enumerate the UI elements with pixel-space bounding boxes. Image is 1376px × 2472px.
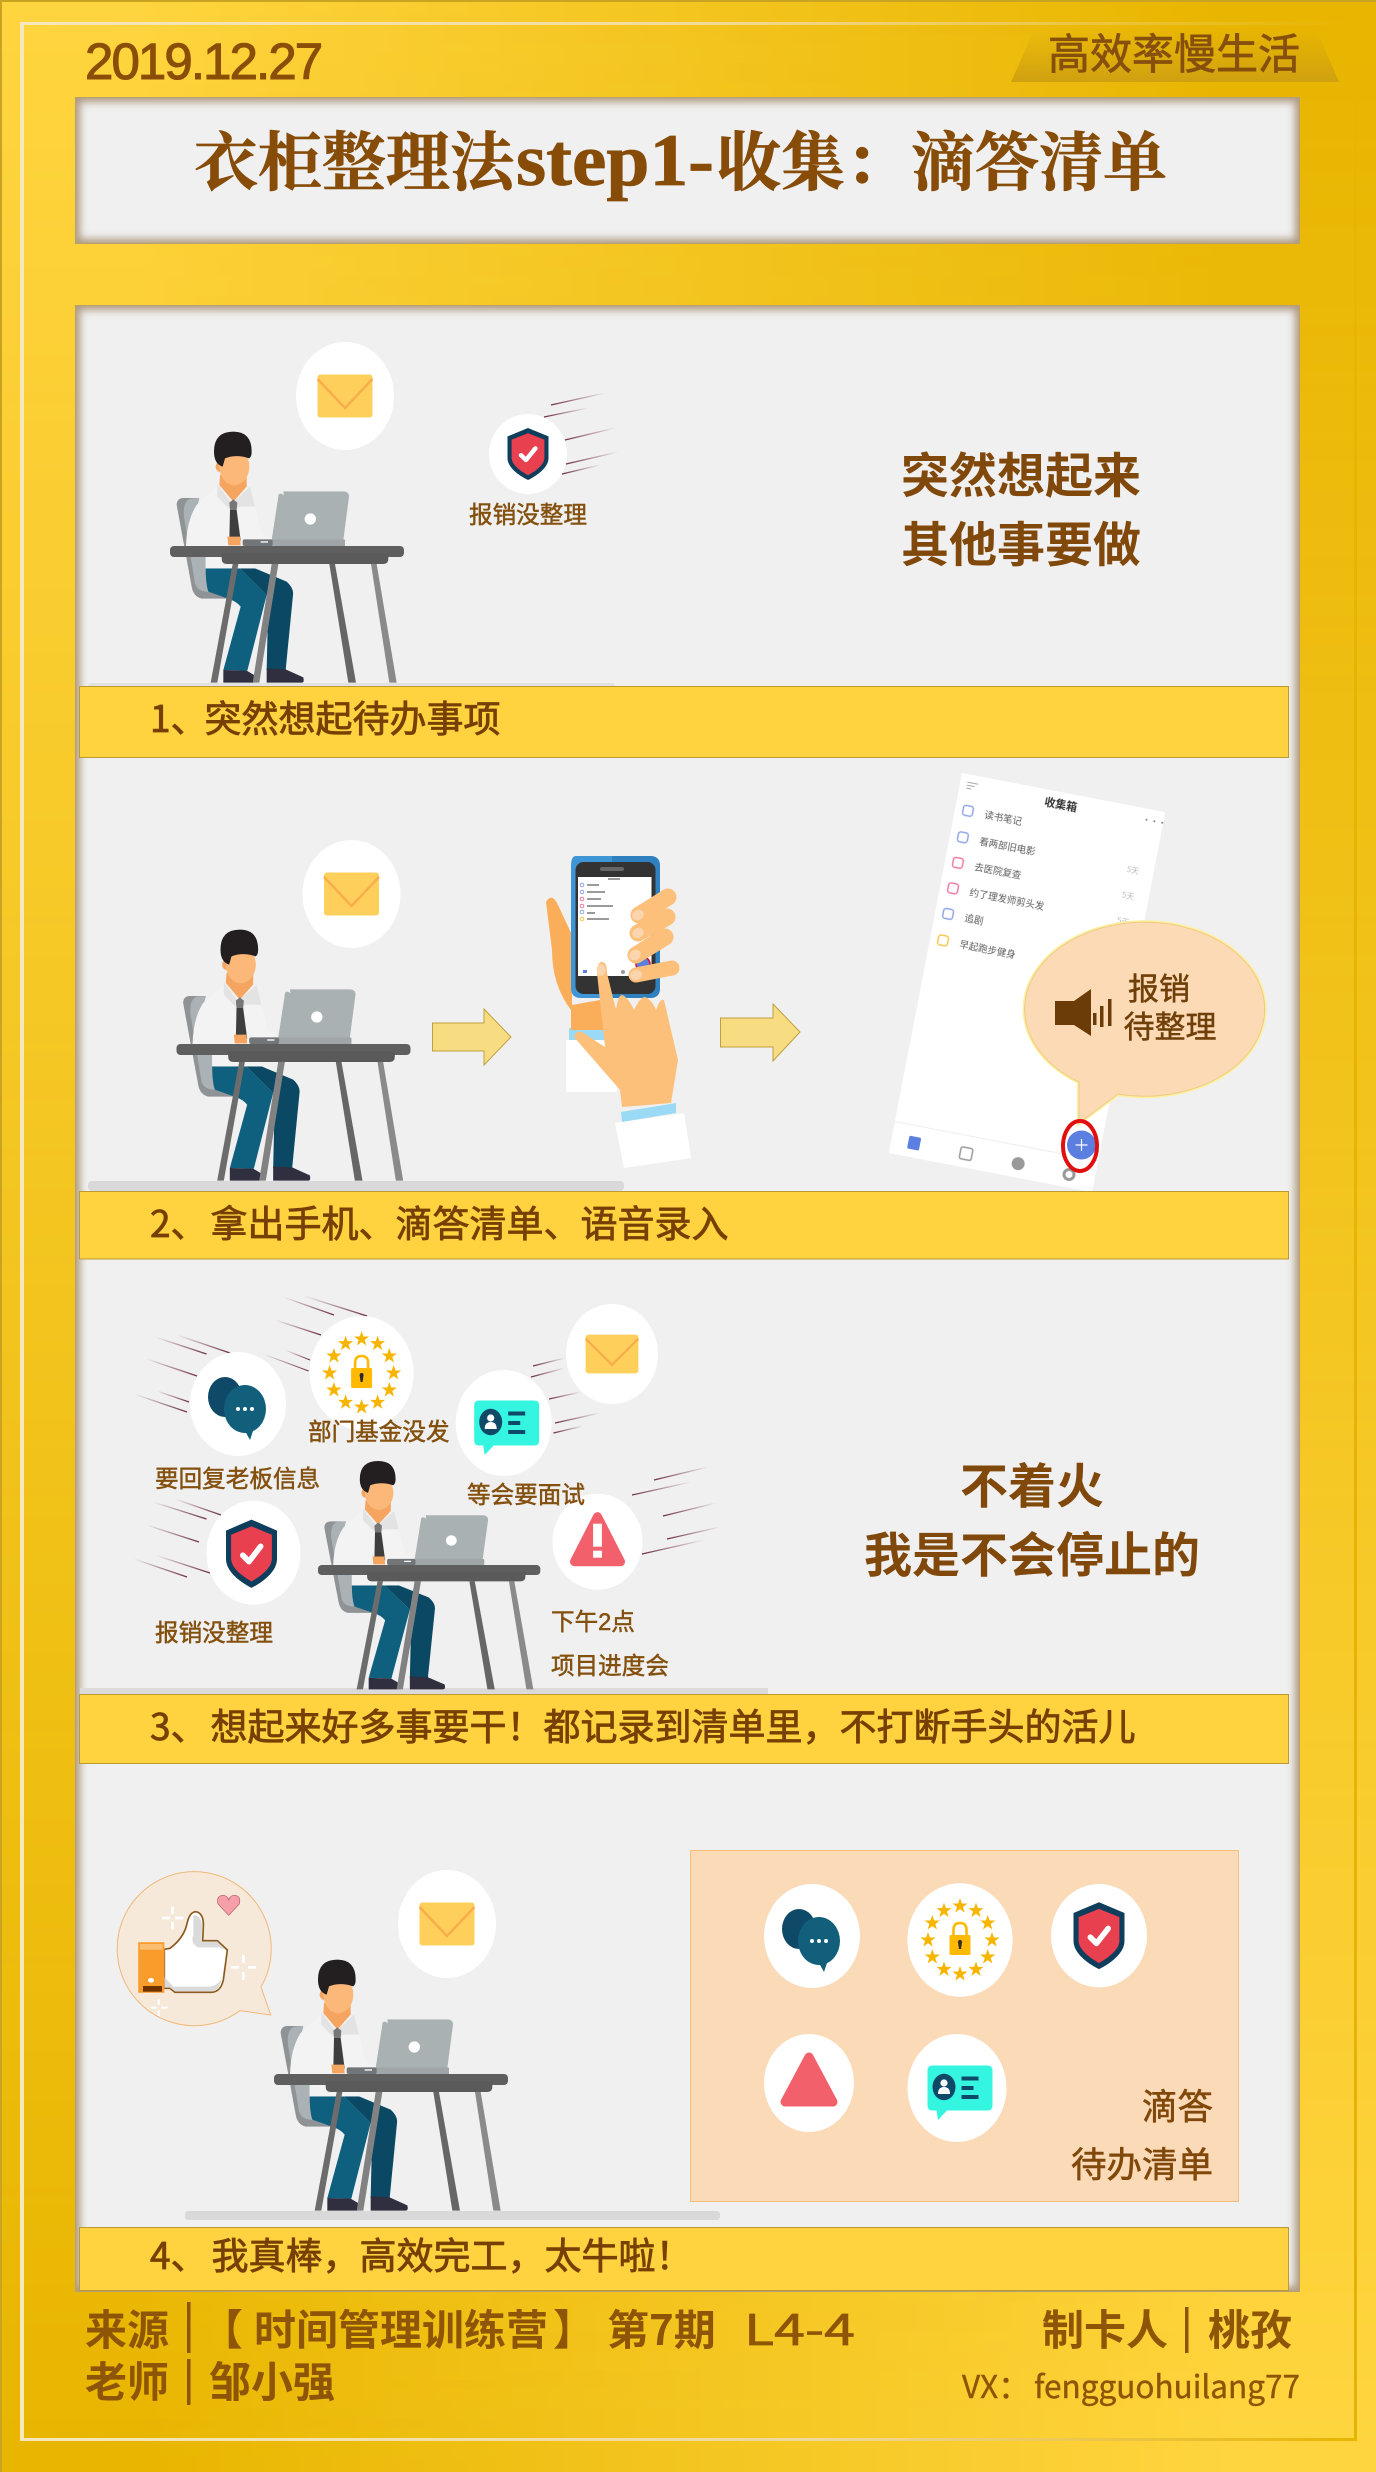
text: 不着火 我是不会停止的: 我是不会停止的 xyxy=(864,1530,1200,1583)
title: 收集： xyxy=(717,112,909,204)
app screenshot: inbox list xyxy=(889,773,1168,1193)
footer: source and teacher: 来源 xyxy=(85,2297,169,2358)
arrow 1 xyxy=(432,1009,511,1065)
text: 突然想起来 其他事要做: 突然想起来 xyxy=(901,450,1141,504)
person at desk 1 xyxy=(170,432,404,683)
title: 衣柜整理法 xyxy=(194,112,519,204)
label: 滴答 待办清单: 待办清单 xyxy=(1071,2137,1213,2188)
app screenshot: inbox list: 看两部旧电影 xyxy=(978,834,1037,858)
title xyxy=(194,112,1167,204)
app screenshot: inbox list: 5天 xyxy=(1121,890,1135,903)
label: 报销没整理: 报销没整理 xyxy=(469,502,587,529)
panel: main content card xyxy=(75,305,1300,2292)
app screenshot: inbox list: 约了理发师剪头发 xyxy=(968,885,1046,913)
title: step1- xyxy=(516,120,714,202)
icon: warning xyxy=(764,2034,854,2132)
footer: source and teacher: L4-4 xyxy=(744,2297,855,2358)
callout: 报销待整理: 报销 xyxy=(1128,964,1190,1009)
icon: chat xyxy=(764,1884,860,1988)
title: 滴答清单 xyxy=(911,112,1167,204)
callout: thumbs up xyxy=(117,1872,271,2026)
red ring around add button xyxy=(1063,1121,1097,1171)
panel 1: sudden thought xyxy=(80,342,1288,758)
footer: author and wechat: 桃孜 xyxy=(1208,2297,1292,2358)
icon: card xyxy=(908,2034,1006,2142)
icon: card bubble 3 xyxy=(456,1370,552,1476)
person at desk 4 xyxy=(274,1960,508,2211)
step bar 4 xyxy=(80,2226,1288,2290)
app screenshot: inbox list: 5天 xyxy=(1116,915,1130,928)
speed lines 3 right xyxy=(531,1358,720,1554)
icon: warning bubble 3 xyxy=(552,1494,642,1590)
label: 要回复老板信息: 要回复老板信息 xyxy=(155,1466,320,1493)
panel: title card xyxy=(75,97,1300,244)
brand tag: 高效率慢生活: 高效率慢生活 xyxy=(1048,21,1300,82)
icon: lock stars 3 xyxy=(310,1316,414,1430)
icon: shield bubble 1 xyxy=(489,414,567,494)
text: 突然想起来 其他事要做 xyxy=(901,450,1141,572)
footer: author and wechat: fengguohuilang77 xyxy=(1034,2362,1300,2408)
person at desk 3 xyxy=(318,1461,540,1689)
icon: chat bubble 3 xyxy=(190,1352,286,1456)
label: 报销没整理: 报销没整理 xyxy=(155,1620,273,1647)
footer: source and teacher: 【 xyxy=(201,2297,243,2358)
panel 3: many todos xyxy=(80,1296,1288,1764)
panel 2: phone voice input xyxy=(80,773,1288,1259)
floor shadow 3 xyxy=(80,1688,768,1695)
app screenshot: inbox list: 追剧 xyxy=(963,910,985,928)
text: 突然想起来 其他事要做: 其他事要做 xyxy=(901,520,1141,572)
step bar 3 xyxy=(80,1694,1288,1764)
icon: mail bubble 4 xyxy=(398,1870,496,1978)
floor shadow 4 xyxy=(185,2211,720,2220)
callout: 报销待整理: 待整理 xyxy=(1124,1002,1216,1047)
callout: 报销待整理 xyxy=(1025,922,1265,1123)
icon: mail bubble 3 xyxy=(566,1304,658,1404)
app screenshot: inbox list: 读书笔记 xyxy=(983,807,1024,828)
step bar 1 xyxy=(80,686,1288,758)
label: 部门基金没发: 部门基金没发 xyxy=(308,1419,450,1446)
footer: source and teacher: 第7期 xyxy=(607,2297,716,2358)
text: 不着火 我是不会停止的: 不着火 xyxy=(960,1461,1104,1514)
footer: source and teacher xyxy=(85,2297,855,2410)
footer: source and teacher: 】 xyxy=(553,2297,595,2358)
icon: shield bubble 3 xyxy=(206,1501,300,1605)
app screenshot: inbox list: 5天 xyxy=(1126,864,1140,877)
footer: author and wechat xyxy=(962,2297,1300,2408)
panel 4: done xyxy=(80,1850,1288,2290)
step bar 2 xyxy=(80,1192,1288,1259)
text: 不着火 我是不会停止的 xyxy=(864,1461,1200,1583)
footer: source and teacher: 老师 xyxy=(85,2349,169,2410)
footer: author and wechat: 制卡人 xyxy=(1042,2297,1168,2358)
label: 滴答 待办清单 xyxy=(1071,2079,1213,2188)
floor shadow 1 xyxy=(88,683,615,689)
icon: lock stars xyxy=(907,1883,1013,1997)
icon: speaker xyxy=(1055,989,1112,1036)
label: 下午2点: 下午2点 xyxy=(551,1609,635,1636)
floor shadow 2 xyxy=(88,1181,624,1191)
step bar 2: 2、拿出手机、滴答清单、语音录入 xyxy=(150,1194,729,1248)
footer: source and teacher: 邹小强 xyxy=(209,2349,335,2410)
speed lines 3 left xyxy=(134,1296,367,1577)
icon: shield xyxy=(1051,1884,1147,1987)
app screenshot: inbox list: 早起跑步健身 xyxy=(958,937,1017,961)
hands holding phone xyxy=(546,856,691,1168)
arrow 2 xyxy=(720,1004,800,1061)
app screenshot: inbox list: ••• xyxy=(1141,814,1167,829)
icon: mail bubble 2 xyxy=(302,840,400,948)
footer: source and teacher: 时间管理训练营 xyxy=(254,2297,548,2358)
app screenshot: inbox list: 去医院复查 xyxy=(973,859,1023,882)
label: 等会要面试: 等会要面试 xyxy=(467,1482,585,1509)
step bar 3: 3、想起来好多事要干！都记录到清单里，不打断手头的活儿 xyxy=(150,1697,1136,1751)
step bar 4: 4、我真棒，高效完工，太牛啦！ xyxy=(150,2226,693,2280)
step bar 1: 1、突然想起待办事项 xyxy=(150,689,501,743)
speed lines 1 xyxy=(544,393,618,474)
footer: author and wechat: VX： xyxy=(962,2362,1030,2408)
date: 2019.12.27 xyxy=(85,33,321,90)
app screenshot: inbox list: 收集箱 xyxy=(1043,793,1079,815)
person at desk 2 xyxy=(176,930,410,1181)
label: 滴答 待办清单: 滴答 xyxy=(1142,2079,1213,2130)
icon: mail bubble 1 xyxy=(296,342,394,450)
label: 项目进度会: 项目进度会 xyxy=(551,1653,669,1680)
panel: todo list icons xyxy=(690,1850,1238,2202)
